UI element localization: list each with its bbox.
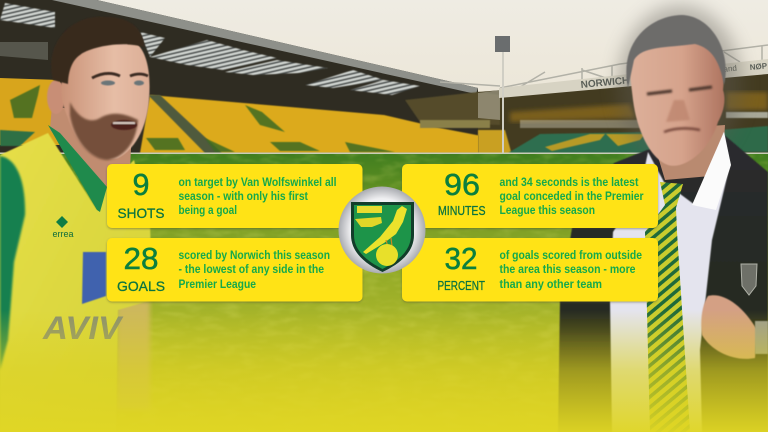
shots text: on target by Van Wolfswinkel all (178, 177, 336, 189)
castle (357, 206, 382, 213)
seats (0, 78, 60, 145)
goals text (178, 250, 330, 291)
suit (558, 133, 768, 432)
percent text: the area this season - more (500, 264, 636, 276)
roof banner: NØP (749, 61, 768, 72)
lion (355, 217, 382, 227)
percent label: PERCENT (438, 279, 485, 293)
tie (645, 182, 690, 432)
goals text: - the lowest of any side in the (178, 264, 324, 276)
minutes text (500, 177, 644, 217)
roof banner: NORWICH A (580, 74, 639, 91)
goals label: GOALS (117, 278, 165, 294)
roof banner: land (721, 64, 737, 74)
icon: Norwich City crest on white ball (338, 186, 426, 274)
face (61, 40, 150, 159)
canary (363, 206, 407, 254)
neck (650, 125, 725, 180)
head (630, 20, 724, 166)
crest pin (741, 264, 757, 295)
goals number: 28 (124, 241, 158, 276)
shots label: SHOTS (118, 205, 164, 221)
minutes text: goal conceded in the Premier (500, 191, 644, 203)
hair (626, 15, 726, 88)
shirt body (0, 133, 152, 432)
shots text: being a goal (178, 205, 237, 217)
eyes and mouth (92, 73, 148, 130)
sponsor block (82, 252, 106, 304)
shield (351, 202, 414, 272)
minutes text: League this season (500, 205, 595, 217)
floodlight (495, 36, 510, 153)
panel: minutes stat (402, 164, 658, 228)
goals text: scored by Norwich this season (178, 250, 330, 262)
percent text (500, 250, 642, 291)
arm (117, 300, 150, 410)
minutes text: and 34 seconds is the latest (500, 177, 639, 189)
goals text: Premier League (178, 279, 256, 291)
bottom yellow fade (0, 310, 768, 432)
bird legs (386, 238, 392, 247)
green sleeve (0, 156, 25, 370)
pitch (0, 152, 768, 432)
percent number: 32 (444, 241, 478, 276)
stadium: left stand (0, 0, 500, 155)
green collar (48, 125, 107, 212)
neck (50, 105, 132, 195)
features (647, 87, 712, 132)
collar (692, 132, 731, 210)
beard (70, 102, 138, 160)
roof banner (499, 59, 768, 98)
kit maker logo: errea (52, 229, 74, 239)
sponsor word: AVIV (42, 310, 124, 346)
hand (701, 295, 757, 359)
panel: shots stat (107, 164, 362, 228)
minutes number: 96 (444, 167, 480, 202)
truss on roof (440, 45, 768, 90)
roof slats (0, 3, 420, 95)
watch (755, 321, 768, 354)
panel: percent stat (402, 238, 658, 302)
manager photo (558, 5, 768, 432)
kit maker logo (52, 216, 74, 239)
percent text: than any other team (500, 279, 602, 291)
shots text: season - with only his first (178, 191, 308, 203)
shirt (610, 132, 730, 432)
shots text (178, 177, 336, 217)
ear (47, 80, 65, 114)
minutes label: MINUTES (438, 204, 486, 218)
yellow ball (376, 244, 398, 266)
stadium: right stand (405, 36, 768, 155)
panel: goals stat (107, 238, 362, 302)
sky background (0, 0, 768, 160)
hair (51, 17, 144, 84)
percent text: of goals scored from outside (500, 250, 642, 262)
shots number: 9 (132, 167, 150, 202)
player photo (0, 17, 152, 432)
